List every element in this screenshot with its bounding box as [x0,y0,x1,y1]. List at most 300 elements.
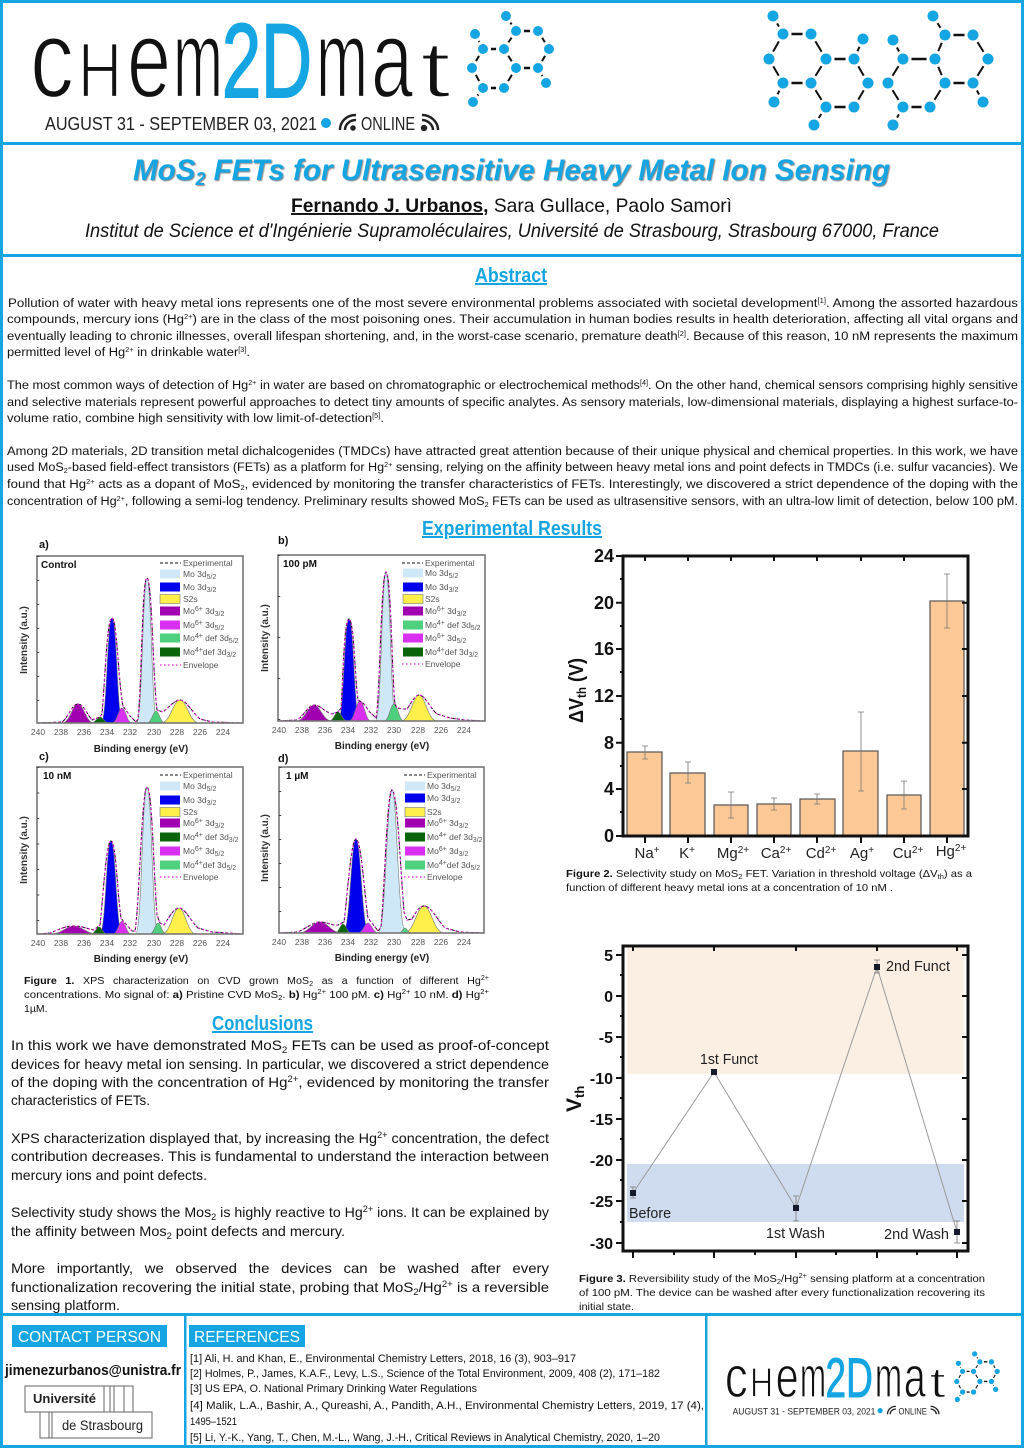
figure 1 caption: 2+ [481,975,489,982]
conclusions text: 2 [282,1045,287,1055]
xps chart c: 10 nM: 3/2 [229,837,239,844]
affiliation: Institut de Science et d'Ingénierie Supramoléculaires, Université de Strasbourg, Strasbourg 67000, France [85,221,939,242]
xps chart d: 1 uM: 3/2 [473,837,483,844]
xps chart c: 10 nM: 6+ [195,846,203,853]
footer conference logo: AUGUST 31 - SEPTEMBER 03, 2021 [733,1406,875,1417]
abstract text: [2] [678,331,686,338]
logo wordmark [30,0,451,121]
conclusions text: 2+ [442,1279,453,1289]
abstract text: 2+ [117,496,125,503]
header conference logo [30,0,554,134]
heading: conclusions: Conclusions [212,1013,313,1035]
xps chart c: 10 nM: 5/2 [207,786,216,793]
conclusions text: point defects and mercury. [172,1223,345,1239]
conclusions text: In this work we have demonstrated MoS [11,1037,260,1053]
xps chart d: 1 uM: 3/2 [459,823,468,830]
logo date line: AUGUST 31 - SEPTEMBER 03, 2021 [45,114,317,134]
xps chart d: 1 uM: d) [278,753,289,765]
xps chart c: 10 nM: Binding energy (eV) [94,954,188,965]
y axis labels: 12 [594,686,614,706]
reference list: 1495–1521 [190,1416,237,1428]
x axis labels: 2+ [955,843,966,854]
xps chart d: 1 uM: 5/2 [451,786,460,793]
xps chart b: 100 pM: 236 [318,725,332,735]
logo wordmark: m [173,0,223,121]
xps chart c: 10 nM: 228 [170,938,184,948]
abstract text: permitted level of Hg [7,345,120,359]
xps chart c: 10 nM: 230 [147,938,161,948]
abstract text: found that Hg [7,477,81,491]
xps chart b: 100 pM: Mo [425,606,437,616]
xps chart b: 100 pM: Mo 3d [425,582,449,592]
footer conference logo: a [904,1345,926,1410]
point labels: 1st Funct [700,1051,759,1068]
xps chart a: control: S2s [183,594,198,604]
xps chart c: 10 nM: 240 [31,938,45,948]
xps chart b: 100 pM: def 3d [445,647,469,657]
title: FETs for Ultrasensitive Heavy Metal Ion Sensing [205,154,890,187]
xps chart d: 1 uM: 240 [272,937,286,947]
contact heading: CONTACT PERSON [18,1329,161,1346]
xps chart d: 1 uM: 3d [447,818,459,828]
data points [630,964,960,1235]
reference list: [2] Holmes, P., James, K.A.F., Levy, L.S., Science of the Total Environment, 2009, 408 (2), 171–182 [190,1368,660,1380]
point labels: 2nd Funct [886,958,951,975]
xps chart b: 100 pM: def 3d [445,620,471,630]
y axis labels: -5 [599,1030,613,1047]
abstract text: 2+ [184,314,193,321]
xps chart b: 100 pM: Intensity (a.u.) [260,604,271,672]
abstract text: and selective materials represent powerful approaches to detect tiny amounts of specific analytes. As sensory materials, low-dimensional materials, displaying a highest surface-to- [7,395,1018,409]
abstract text: FETs can be used as ultrasensitive sensors, with an ultra-low limit of detection, below 100 pM. [489,494,1018,508]
conclusions text: devices for heavy metal ion sensing. In particular, we discovered a strict dependence [11,1056,549,1072]
xps chart d: 1 uM: Mo 3d [427,781,451,791]
xps chart a: control: 226 [193,727,207,737]
abstract text: . On the other hand, chemical sensors comprising highly sensitive [648,378,1018,392]
xps chart d: 1 uM: 6+ [439,846,447,853]
xps chart a: control: 230 [147,727,161,737]
xps chart b: 100 pM: Mo [425,633,437,643]
logo dot [321,118,331,128]
conclusions text: 2 [167,1231,172,1241]
figure 2 caption: Figure 2. Selectivity study on MoS [566,868,730,880]
y axis labels: -20 [590,1153,613,1170]
conclusions text: mercury ions and point defects. [11,1167,207,1183]
xps chart c: 10 nM: 3/2 [215,823,224,830]
xps chart b: 100 pM: Envelope [425,659,461,669]
xps chart d: 1 uM: Mo [427,846,439,856]
xps chart a: control: 5/2 [229,638,239,645]
xps chart d: 1 uM: def 3d [447,860,471,870]
reference list: [5] Li, Y.-K., Yang, T., Chen, M.-L., Wang, J.-H., Critical Reviews in Analytical Chemistry, 2020, 1–20 [190,1432,660,1444]
conclusions text: is a reversible [453,1279,549,1295]
xps chart b: 100 pM: Mo 3d [425,568,449,578]
icon: large molecule [764,10,994,130]
xps chart b: 100 pM: Binding energy (eV) [335,741,429,752]
xps chart c: 10 nM: 3d [203,846,215,856]
x axis labels [634,843,966,862]
conclusions text: , evidenced by monitoring the transfer [298,1074,549,1090]
xps chart b: 100 pM: 6+ [437,633,445,640]
conclusions text: is highly reactive to Hg [216,1204,363,1220]
abstract text: Pollution of water with heavy metal ions represents one of the most severe environmental problems associated with societal development [8,296,754,310]
xps chart a: control: 6+ [195,620,203,627]
x axis labels: 2+ [738,845,749,856]
abstract text: 2+ [384,462,392,469]
xps chart a: control: 5/2 [207,574,216,581]
xps chart a: control: 5/2 [215,625,224,632]
abstract text: [3] [238,347,246,354]
x axis labels: + [868,845,874,856]
conclusions text: 2 [413,1287,419,1297]
y axis labels: 16 [594,639,614,659]
xps chart d: 1 uM: 3/2 [451,798,460,805]
figure 3 caption: 2+ [799,1273,807,1280]
point labels [629,958,951,1243]
xps chart c: 10 nM: Intensity (a.u.) [19,816,30,884]
figure 3 caption: 2 [777,1279,781,1286]
xps chart c: 10 nM: S2s [183,807,198,817]
x axis labels: Cu [893,845,912,862]
xps chart d: 1 uM: Mo 3d [427,793,451,803]
conclusions text: 2 [211,1212,216,1222]
xps chart c: 10 nM: Mo [183,832,195,842]
xps chart a: control: 3/2 [207,587,216,594]
xps chart d: 1 uM: Binding energy (eV) [335,953,429,964]
abstract text: eventually leading to chronic illnesses, overall lifespan shortening, and, in the worst-case scenario, premature death [7,329,637,343]
xps chart d: 1 uM: Mo [427,818,439,828]
icon: wifi [340,115,356,130]
x axis labels: + [654,845,660,856]
abstract text: 2+ [125,347,134,354]
xps chart d: 1 uM: 4+ [439,832,447,839]
xps chart c: 10 nM: 5/2 [215,851,224,858]
footer conference logo: e [776,1345,799,1410]
xps chart a: control: 240 [31,727,45,737]
xps chart b: 100 pM: 240 [272,725,286,735]
xps chart b: 100 pM: Mo [425,647,437,657]
conclusions text: functionalization recovering the initial state, probing that MoS [11,1279,388,1295]
abstract text: -based field-effect transistors (FETs) as a platform for Hg [68,460,384,474]
xps chart b: 100 pM: 226 [434,725,448,735]
figure 2 caption: 2 [738,874,743,881]
xps chart a: control: Mo 3d [183,569,207,579]
xps chart a: control: Experimental [183,558,233,568]
title: MoS [133,154,196,187]
figure 1 caption: 1µM. [24,1003,48,1015]
footer conference logo: 2D [826,1347,873,1409]
xps chart c: 10 nM: Envelope [183,872,219,882]
bars [627,601,964,836]
y axis title: ΔV [566,695,588,723]
conclusions text: concentration, the defect [388,1130,549,1146]
figure 1 caption: 2+ [317,989,326,996]
y axis labels: 4 [604,779,614,799]
heading: experimental results: Experimental Results [422,518,602,540]
conclusions text [11,1037,549,1313]
xps chart d: 1 uM: 232 [364,937,378,947]
xps chart d: 1 uM: 236 [318,937,332,947]
conclusions text: 2+ [287,1074,298,1084]
conclusions text: contribution decreases. This is fundamental to understand the interaction between [11,1148,549,1164]
xps chart c: 10 nM: Experimental [183,770,233,780]
xps chart b: 100 pM: 3d [445,633,457,643]
logo online label: ONLINE [361,114,415,134]
point labels: 2nd Wash [884,1226,949,1243]
xps chart a: control: Intensity (a.u.) [19,606,30,674]
figure 1 caption: 2+ [402,989,410,996]
xps chart d: 1 uM: 3d [447,846,459,856]
reference list: [4] Malik, L.A., Bashir, A., Qureashi, A., Pandith, A.H., Environmental Chemistry Letters, 2019, 17 (4), [190,1400,704,1412]
abstract text: ) are in the class of the most poisoning ones. Their accumulation in human bodies results in health deterioration, affecting all vital organs and [193,312,1018,326]
abstract text: . Among the assorted hazardous [826,296,1018,310]
xps chart d: 1 uM [260,753,484,964]
xps chart a: control: def 3d [203,633,229,643]
panel: contact person [4,1325,181,1438]
xps chart d: 1 uM: def 3d [447,832,473,842]
xps chart c: 10 nM: Mo [183,846,195,856]
xps chart b: 100 pM: Mo [425,620,437,630]
conclusions text: Selectivity study shows the Mos [11,1204,209,1220]
xps chart c: 10 nM [19,751,243,965]
x axis labels: Na [634,845,654,862]
authors: Fernando J. Urbanos, Sara Gullace, Paolo Samorì [291,195,732,217]
line chart: reversibility [563,946,968,1258]
conclusions text: /Hg [419,1279,442,1295]
logo wordmark: H [78,26,122,114]
xps chart a: control: Mo [183,633,195,643]
xps chart d: 1 uM: 3/2 [459,851,468,858]
y axis labels: -15 [590,1112,613,1129]
figure 1 caption: b) Hg [289,989,316,1001]
university logo: de Strasbourg [62,1417,143,1433]
xps chart b: 100 pM: 3/2 [468,652,478,659]
xps chart a: control: a) [39,539,49,551]
xps chart c: 10 nM: 5/2 [226,865,236,872]
xps chart c: 10 nM: 4+ [195,832,203,839]
xps chart b: 100 pM: 4+ [437,620,445,627]
xps chart b: 100 pM: 100 pM [283,559,317,570]
bar chart: selectivity [566,546,968,862]
reference list: [3] US EPA, O. National Primary Drinking Water Regulations [190,1383,477,1395]
figure 3 caption: initial state. [579,1301,634,1313]
y axis labels [594,546,614,846]
footer conference logo: c [725,1345,748,1410]
y axis labels: -10 [590,1071,613,1088]
figure 1 caption: . [282,989,289,1001]
logo wordmark: c [30,0,74,121]
figure 3 caption: /Hg [781,1273,799,1285]
abstract text: [1] [818,298,826,305]
point labels: 1st Wash [766,1225,825,1242]
y axis labels: -30 [590,1236,613,1253]
xps chart b: 100 pM: 238 [295,725,309,735]
xps chart c: 10 nM: def 3d [203,832,229,842]
panel: references [189,1325,704,1444]
xps chart d: 1 uM: 6+ [439,818,447,825]
abstract text: 2+ [86,479,95,486]
y axis title: V [563,1098,586,1112]
title: 2 [194,169,205,189]
x axis labels: Cd [806,845,825,862]
xps chart d: 1 uM: 226 [434,937,448,947]
xps chart b: 100 pM: 5/2 [449,573,458,580]
figure 1 caption: 100 pM. [326,989,374,1001]
logo wordmark: 2D [222,3,312,120]
y axis title: (V) [566,658,588,687]
xps chart a: control [19,539,243,755]
abstract text: [4] [640,380,648,387]
conclusions text: sensing platform. [11,1297,120,1313]
xps chart a: control: Control [41,560,77,571]
xps chart a: control: 3d [203,620,215,630]
xps chart a: control: def 3d [203,647,227,657]
y axis labels: -25 [590,1194,613,1211]
xps chart a: control: 232 [123,727,137,737]
error bars [630,960,960,1243]
abstract text: concentration of Hg [7,494,114,508]
x axis labels: Hg [936,843,955,860]
conclusions text: the affinity between Mos [11,1223,162,1239]
xps chart c: 10 nM: 10 nM [43,771,71,782]
figure 2 caption: ) as a [944,868,972,880]
y axis labels: 8 [604,733,614,753]
xps chart a: control: 236 [77,727,91,737]
figure 3 caption: Figure 3. Reversibility study of the MoS [579,1273,767,1285]
figure 2 caption: FET. Variation in threshold voltage (ΔV [742,868,938,880]
xps chart c: 10 nM: 4+ [195,860,203,867]
abstract text: acts as a dopant of MoS [95,477,240,491]
xps chart b: 100 pM: 5/2 [457,638,466,645]
xps chart b: 100 pM: 3d [445,606,457,616]
figure 1 caption: 2+ [480,989,489,996]
xps chart b: 100 pM: 224 [457,725,471,735]
xps chart c: 10 nM: Mo [183,818,195,828]
xps chart c: 10 nM: 224 [216,938,230,948]
abstract text: . [380,411,384,425]
xps chart b: 100 pM: 3/2 [457,611,466,618]
xps chart d: 1 uM: S2s [427,807,442,817]
xps chart d: 1 uM: 1 µM [286,771,308,782]
abstract text: volume ratio, combine high sensitivity with low limit-of-detection [7,411,351,425]
conclusions text: 2+ [363,1204,373,1214]
xps chart c: 10 nM: 6+ [195,818,203,825]
xps chart a: control: 228 [170,727,184,737]
xps chart b: 100 pM: 232 [364,725,378,735]
y axis labels: 24 [594,546,614,566]
logo wordmark: m [316,0,368,121]
xps chart c: 10 nM: 236 [77,938,91,948]
figure 1 caption: Figure 1. XPS characterization on CVD grown MoS [24,975,304,987]
y axis title: th [574,687,589,698]
xps chart d: 1 uM: 4+ [439,860,447,867]
xps chart a: control: 4+ [195,647,203,654]
figure 1 caption: 2 [309,981,313,988]
y axis labels: 0 [604,989,613,1006]
abstract text: sensing, relying on the affinity between heavy metal ions and point defects in TMDCs (i.e. sulfur vacancies). We [392,460,1018,474]
xps chart a: control: 238 [54,727,68,737]
figure 3 caption [579,1273,985,1313]
abstract text: used MoS [7,460,62,474]
xps chart d: 1 uM: 230 [387,937,401,947]
y axis labels: 0 [604,826,614,846]
xps chart c: 10 nM: 226 [193,938,207,948]
xps chart a: control: 3/2 [215,611,224,618]
references heading: REFERENCES [194,1329,300,1346]
xps chart b: 100 pM [260,535,485,752]
xps chart b: 100 pM: 5/2 [471,625,481,632]
xps chart a: control: 3d [203,606,215,616]
footer conference logo: t [929,1359,946,1406]
figure 2 caption: th [938,874,944,881]
abstract text: 2+ [248,380,256,387]
xps chart d: 1 uM: Mo [427,860,439,870]
xps chart d: 1 uM: 234 [341,937,355,947]
university logo: Université [33,1391,96,1406]
xps chart d: 1 uM: Mo [427,832,439,842]
xps chart b: 100 pM: Experimental [425,558,475,568]
x axis labels: 2+ [780,845,791,856]
xps chart a: control: Binding energy (eV) [94,744,188,755]
xps chart c: 10 nM: Mo 3d [183,781,207,791]
abstract text: Among 2D materials, 2D transition metal dichalcogenides (TMDCs) have attracted great attention because of their unique physical and chemical properties. In this work, we have [7,444,1018,458]
y axis labels [590,948,613,1253]
xps chart b: 100 pM: 4+ [437,647,445,654]
xps chart c: 10 nM: 238 [54,938,68,948]
x axis labels: Mg [717,845,738,862]
x axis labels: 2+ [825,845,836,856]
footer conference logo: m [875,1345,902,1410]
logo wordmark: a [371,0,414,121]
contact email: jimenezurbanos@unistra.fr [4,1363,181,1379]
university logo [25,1386,152,1438]
xps chart a: control: 224 [216,727,230,737]
y axis labels: 20 [594,593,614,613]
abstract text: 2 [485,502,489,509]
xps chart a: control: Mo 3d [183,582,207,592]
xps chart c: 10 nM: 232 [123,938,137,948]
xps chart d: 1 uM: 228 [411,937,425,947]
point labels: Before [629,1205,671,1222]
xps chart d: 1 uM: 238 [295,937,309,947]
xps chart a: control: 3/2 [226,652,236,659]
logo wordmark: t [420,25,451,114]
xps chart d: 1 uM: 5/2 [470,865,480,872]
xps chart b: 100 pM: 230 [387,725,401,735]
chart frame and ticks [616,556,968,843]
xps chart b: 100 pM: S2s [425,594,440,604]
conclusions text: FETs can be used as proof-of-concept [287,1037,549,1053]
conclusions text: ions. It can be explained by [373,1204,549,1220]
abstract text: 2 [240,485,245,492]
figure 1 caption: d) Hg [452,989,479,1001]
xps chart a: control: 234 [100,727,114,737]
reference list [190,1353,704,1444]
icon: signal [422,115,438,130]
figure 1 caption: concentrations. Mo signal of: a) Pristine CVD MoS [24,989,270,1001]
x axis labels: Ca [761,845,780,862]
abstract text: , evidenced by monitoring the transfer characteristics of FETs. Interestingly, we discovered a strict dependence of the doping with the [245,477,1018,491]
xps chart a: control: Mo [183,606,195,616]
xps chart a: control: 6+ [195,606,203,613]
figure 2 caption [566,868,972,894]
xps chart a: control: Envelope [183,660,219,670]
xps chart c: 10 nM: 3d [203,818,215,828]
figure 3 caption: sensing platform at a concentration [807,1273,985,1285]
xps chart c: 10 nM: c) [39,751,49,763]
figure 3 caption: of 100 pM. The device can be washed after every functionalization recovering its [579,1287,985,1299]
figure 1 caption: c) Hg [374,989,400,1001]
